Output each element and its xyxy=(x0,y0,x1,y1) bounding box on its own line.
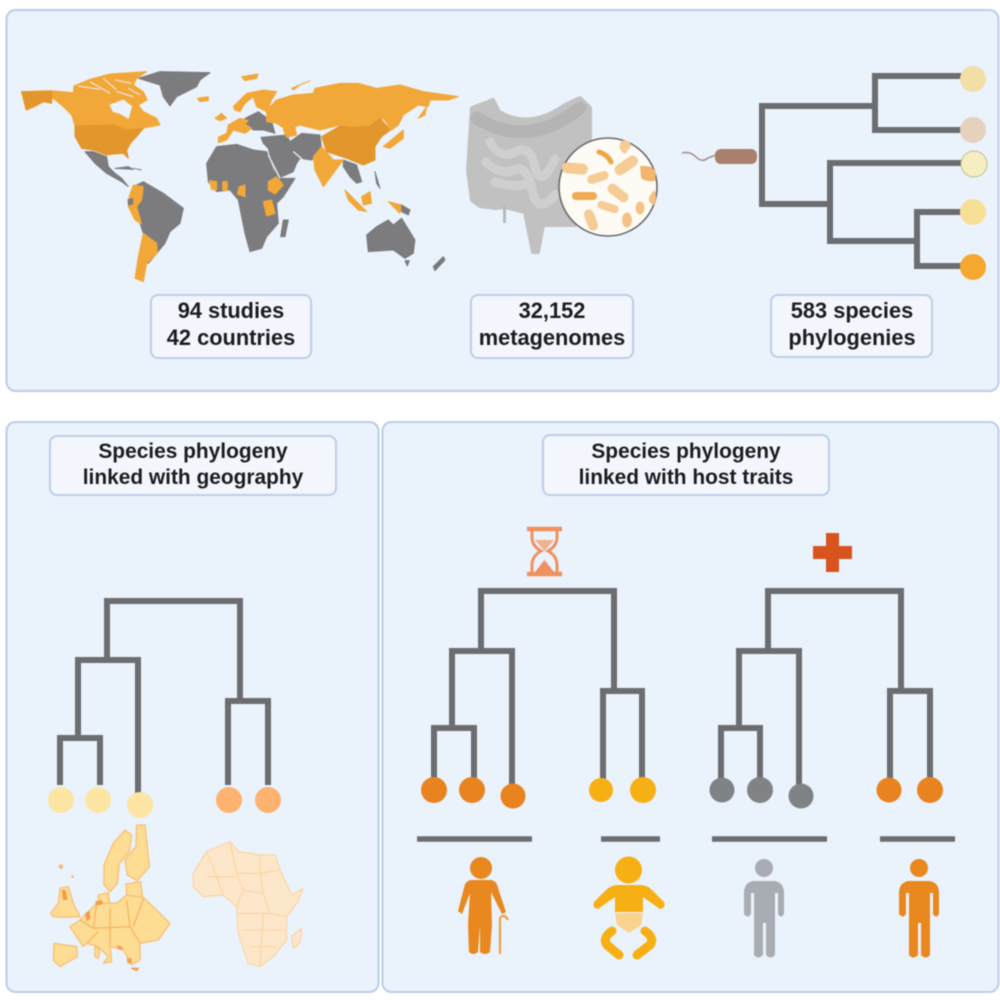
stat box: studies and countries: 42 countries xyxy=(167,325,295,350)
species phylogeny tree xyxy=(762,66,987,280)
health tree xyxy=(710,591,943,808)
heading: host traits xyxy=(543,435,829,495)
tips: health tree xyxy=(710,777,943,808)
heading: host traits: Species phylogeny xyxy=(591,440,781,463)
geography tree xyxy=(48,601,281,818)
panel: phylogeny and geography xyxy=(6,422,378,992)
heading: geography: linked with geography xyxy=(83,466,304,489)
stat box: studies and countries xyxy=(151,295,311,358)
icon: bacterium xyxy=(682,149,757,164)
icon: hourglass xyxy=(527,529,562,574)
heading: host traits: linked with host traits xyxy=(579,466,793,489)
heading: geography xyxy=(50,436,336,495)
world map xyxy=(22,72,458,282)
stat box: metagenomes: 32,152 xyxy=(519,298,585,323)
age tree xyxy=(421,591,656,808)
icon: baby xyxy=(594,856,664,955)
icon: plus sign xyxy=(813,533,852,572)
stat box: metagenomes xyxy=(471,295,633,358)
icon: elderly person xyxy=(458,857,508,954)
icon: intestine with magnified bacteria xyxy=(468,98,657,252)
magnified bacteria circle xyxy=(559,138,657,236)
panel: global data overview xyxy=(6,10,998,391)
stat box: species phylogenies xyxy=(771,295,932,357)
heading: geography: Species phylogeny xyxy=(98,440,288,463)
tips: age tree xyxy=(421,777,656,808)
group bars xyxy=(417,836,955,842)
map: Europe xyxy=(51,825,170,971)
stat box: studies and countries: 94 studies xyxy=(178,298,284,323)
stat box: metagenomes: metagenomes xyxy=(479,325,625,350)
map: Africa xyxy=(193,842,303,967)
icon: orange adult xyxy=(899,859,939,958)
stat box: species phylogenies: phylogenies xyxy=(788,325,916,350)
icon: grey adult xyxy=(744,859,784,958)
panel: phylogeny and host traits xyxy=(382,422,998,992)
stat box: species phylogenies: 583 species xyxy=(791,298,913,323)
tree tips xyxy=(960,66,987,280)
tips xyxy=(48,787,281,818)
